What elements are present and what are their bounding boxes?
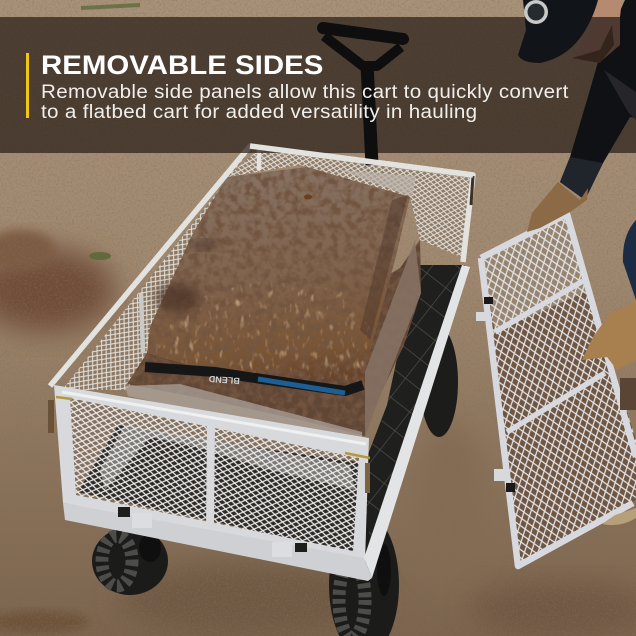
dark folds on bag — [156, 195, 408, 340]
back mesh panel — [227, 150, 470, 258]
boots — [620, 378, 636, 410]
jeans — [623, 220, 636, 300]
upper glove — [527, 182, 588, 232]
lower person: gloves, jeans and boots — [582, 220, 636, 525]
accent bar — [26, 53, 29, 118]
cap — [518, 0, 598, 63]
front mesh panel — [54, 385, 369, 562]
handle — [323, 28, 403, 165]
rear wheel — [420, 327, 458, 437]
torso and arm — [560, 0, 636, 200]
cart side rails and back frame — [50, 146, 473, 386]
deck plate and right rail — [48, 176, 473, 581]
body text: to a flatbed cart for added versatility in hauling — [41, 102, 477, 123]
panel frame — [54, 385, 369, 562]
bag label strap — [145, 367, 363, 393]
cart deck — [362, 265, 465, 560]
lower glove — [582, 302, 636, 370]
body text — [41, 82, 569, 123]
body text: Removable side panels allow this cart to quickly convert — [41, 82, 569, 103]
upper bag — [147, 167, 410, 383]
dark translucent banner — [0, 17, 636, 153]
front right wheel — [329, 513, 399, 636]
title: REMOVABLE SIDES — [41, 50, 323, 80]
back rail over mast — [250, 146, 473, 175]
view through mesh — [68, 395, 362, 553]
cap logo — [524, 0, 548, 24]
front left wheel — [92, 527, 168, 595]
mulch bags — [125, 167, 421, 440]
removed side panel — [476, 214, 636, 566]
lower bag — [125, 240, 421, 440]
bag label strap: BLEND — [208, 374, 240, 386]
wheels — [92, 327, 458, 636]
left mesh panel — [62, 148, 252, 390]
upper person: arm, face, cap and glove — [518, 0, 636, 232]
face and beard — [570, 17, 620, 62]
